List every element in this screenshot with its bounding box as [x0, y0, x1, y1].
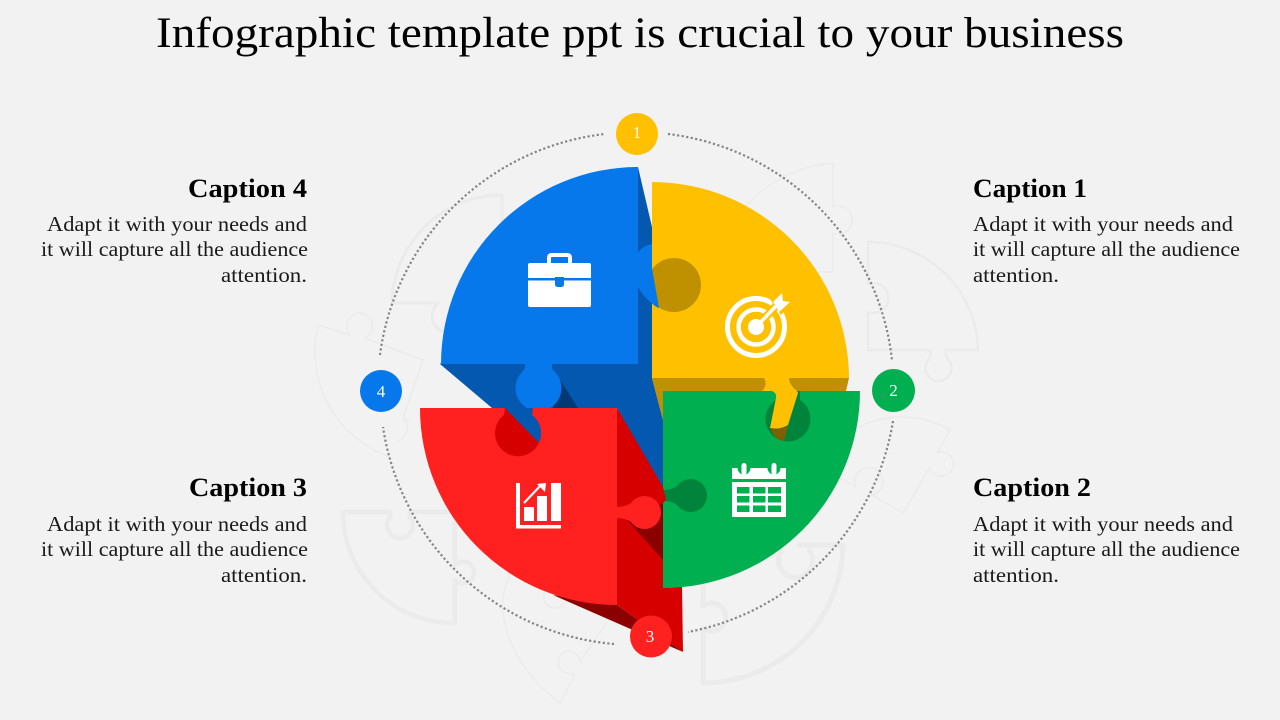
background ghost puzzle pieces	[315, 163, 978, 703]
caption 1: Adapt it with your needs and	[973, 212, 1233, 236]
number badge 2	[872, 369, 915, 412]
caption 4	[41, 174, 308, 287]
caption 2: Adapt it with your needs and	[973, 512, 1233, 536]
title: Infographic template ppt is crucial to your business	[156, 10, 1124, 57]
caption 3: Caption 3	[189, 473, 307, 502]
puzzle piece: blue (caption 4)	[440, 167, 663, 490]
number badge 4	[360, 370, 402, 412]
caption 4: Caption 4	[188, 174, 307, 203]
dotted ring	[380, 134, 893, 644]
red face with knob and socket	[420, 404, 666, 605]
icon: briefcase	[528, 255, 591, 307]
caption 3: attention.	[221, 563, 307, 587]
blue face	[441, 167, 638, 411]
puzzle piece: red side (caption 3)	[553, 408, 683, 652]
caption 1: it will capture all the audience	[973, 237, 1240, 261]
yellow knob	[762, 378, 798, 441]
number badge 2: 2	[889, 381, 898, 400]
red socket	[495, 408, 541, 456]
red knob shadow	[627, 503, 663, 560]
caption 4: Adapt it with your needs and	[47, 212, 307, 236]
caption 4: it will capture all the audience	[41, 237, 308, 261]
red extruded side	[617, 408, 683, 652]
green face	[663, 391, 860, 588]
icon: bar chart	[516, 483, 561, 528]
blue extrusion in socket	[505, 408, 541, 443]
blue right knob	[638, 244, 659, 308]
blue extruded side	[440, 167, 663, 490]
yellow extruded side	[652, 378, 849, 420]
green left socket	[663, 479, 707, 512]
caption 2: it will capture all the audience	[973, 537, 1240, 561]
number badge 3	[630, 616, 672, 658]
caption 2: attention.	[973, 563, 1059, 587]
caption 2: Caption 2	[973, 473, 1091, 502]
yellow socket	[647, 258, 701, 312]
green top socket	[766, 391, 810, 442]
blue knob through socket	[652, 297, 659, 308]
caption 3	[41, 473, 308, 587]
number badge 4: 4	[377, 382, 386, 401]
yellow knob shadow	[770, 426, 788, 441]
blue knob shadow	[553, 378, 578, 408]
yellow face	[652, 182, 849, 378]
caption 3: Adapt it with your needs and	[47, 512, 307, 536]
caption 1	[973, 174, 1240, 287]
caption 4: attention.	[221, 263, 307, 287]
number badge 1: 1	[633, 123, 641, 142]
number badge 3: 3	[646, 627, 654, 646]
caption 3: it will capture all the audience	[41, 537, 308, 561]
caption 1: Caption 1	[973, 174, 1087, 203]
puzzle piece: yellow (caption 1)	[647, 182, 849, 420]
red right knob	[616, 496, 661, 529]
caption 2	[973, 473, 1240, 587]
red bottom shadow	[553, 595, 683, 652]
number badge 1	[616, 113, 658, 155]
caption 1: attention.	[973, 263, 1059, 287]
puzzle piece: green (caption 2)	[663, 391, 860, 588]
icon: calendar	[732, 462, 786, 517]
icon: target	[728, 289, 793, 356]
